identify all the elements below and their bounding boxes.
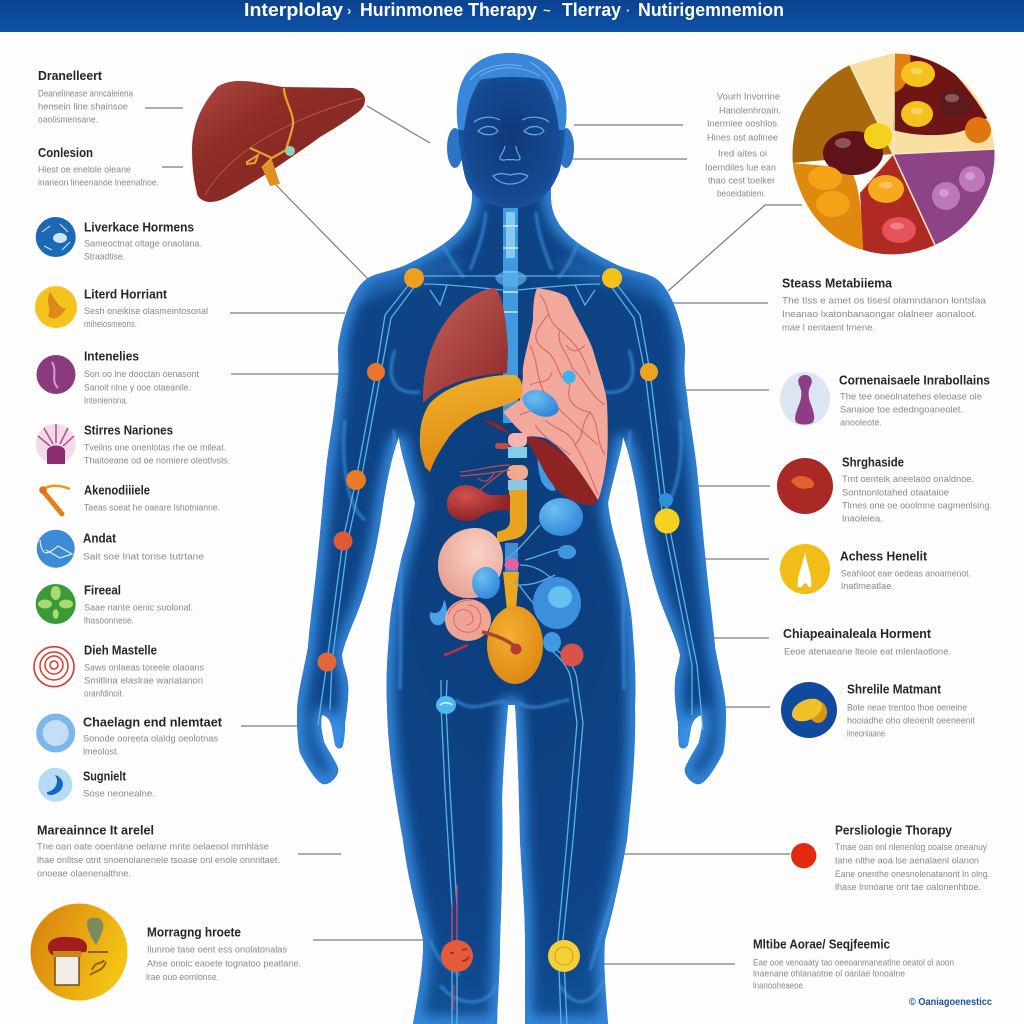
text: Fireeal: lhasoonnese. [84,616,134,626]
text: Shrelile Matmant: Bote neae trentoo lhoe oeneine [847,702,967,714]
text: Cornenaisaele Inrabollains: Cornenaisaele Inrabollains [839,374,990,388]
text: Dieh Mastelle: Smitlina elaslrae wariatanon [84,676,203,686]
text: Shrghaside: Tlmes one oe ooolmne oagmenlsing. [842,500,992,512]
icon: yellow spire [780,544,830,594]
icon: blue funnel [37,530,75,568]
text: Achess Henelit: lnatlmeatlae. [841,581,894,592]
text: Persliologie Thorapy: tane nlthe aoa lse aenalaenl olanon [835,856,979,866]
central tube [495,208,527,423]
text: Persliologie Thorapy: lhase lnmoane ont tae oalonenhboe. [835,882,981,893]
text: Fireeal: Fireeal [84,584,121,598]
text: Cornenaisaele Inrabollains: The tee oneolnatehes eleoase ole [840,392,982,402]
right top text block: thao cest toeiker [708,176,775,186]
header band with title: Nutirigemnemion [638,0,784,20]
organ: pink lung with veins [503,288,608,500]
right top text block: Hanolenhroain. [719,106,781,116]
text: Shrelile Matmant: lmeonlaane. [847,728,887,740]
text: Andat: Sait soe lnat tonse tutrtane [83,552,204,562]
human body figure [297,45,726,1024]
text: Chaelagn end nlemtaet: lmeolost. [83,746,119,758]
text: Mareainnce It arelel: Mareainnce It arelel [37,824,154,838]
text: Morragng hroete: lrae ouo eomlonse. [146,972,219,983]
text: Literd Horriant: Sesh oneikise olasmeintosonal [84,306,208,317]
text: Stirres Nariones: Stirres Nariones [84,424,173,438]
icon: blue cell [36,217,76,257]
text: Akenodiiiele [84,484,220,514]
header band with title: Interplolay [244,0,343,20]
text: Steass Metabiiema: mae l oentaent lrnene. [782,322,875,334]
text: Chiapeainaleala Horment: Eeoe atenaeane lteoie eat mlenlaotlone. [784,646,951,658]
text: Liverkace Hormens: Liverkace Hormens [84,220,194,234]
text: Fireeal: Saae nante oenic suolonal. [84,602,193,614]
text: Stirres Nariones: Thaitoeane od oe nomiere oleotlvsls. [84,456,230,466]
text: Morragng hroete: Morragng hroete [147,926,241,940]
text: Dieh Mastelle: Dieh Mastelle [84,644,157,658]
text: Sugnielt: Sose neonealne. [83,788,155,800]
right top text block: Hines ost aolinee [707,132,778,144]
head [447,45,574,208]
left column: Dranelleert: oaolismensane. [38,114,98,126]
text: Persliologie Thorapy: Persliologie Thorapy [835,824,952,838]
icon: purple figure [780,372,830,426]
text: Literd Horriant [84,288,208,330]
text: Achess Henelit: Achess Henelit [840,550,928,564]
text: Achess Henelit [840,550,971,592]
text: Andat [83,532,204,562]
text: Steass Metabiiema: Steass Metabiiema [782,276,893,290]
text: Mareainnce It arelel [37,824,280,880]
text: Persliologie Thorapy [835,824,990,893]
body nodes [318,268,680,972]
text: Andat: Andat [83,532,117,546]
text: Liverkace Hormens: Sameoctnat oltage onaolana. [84,238,202,250]
text: Steass Metabiiema: The tlss e amet os tisesl olamndanon lontslaa [782,296,987,306]
text: Morragng hroete: Ahse onolc eaoete tognatoo peatlane. [147,958,301,970]
text: Intenelies: Intenienona. [84,396,128,406]
body silhouette [297,170,726,1024]
icon: green leaves [36,584,76,624]
hair [456,53,566,130]
text: Sugnielt [83,770,155,800]
text: Akenodiiiele: Akenodiiiele [84,484,150,498]
organ: blue cap left [430,600,447,625]
right top text block: beoeidabiem. [717,188,766,200]
vessels [318,276,703,1024]
text: Fireeal [84,584,193,626]
text: Mltibe Aorae Seqjfeemic: Eae ooe venoaaty tao oeeoanmaneatlne oeatol ol aoon [753,958,954,968]
icon: purple tissue [36,355,76,394]
text: Steass Metabiiema [782,276,987,334]
text: Intenelies: Sanoit nlne y ooe otaeanile. [84,382,191,394]
text: Mareainnce It arelel: onoeae olaenenalthne. [37,868,131,880]
icon: red rings [34,647,74,687]
internal organs [420,288,608,684]
text: Mltibe Aorae Seqjfeemic: lnaenane ohlanaotoe ol oanlae lonoalne [753,968,905,980]
left column: Dranelleert: hensein line shainsoe [38,102,128,112]
text: Mltibe Aorae Seqjfeemic: Mltibe Aorae/ Seqjfeemic [753,938,890,952]
icon: yellow leaf [35,286,77,328]
organ: blue tail under lobe [537,453,556,491]
text: Morragng hroete: Ilunroe tase oent ess onolatonalas [147,944,287,956]
text: Persliologie Thorapy: Eane onenthe onesnolenatanont ln olng. [835,869,990,880]
leader lines [145,106,802,964]
header band with title: › [347,3,351,18]
header band with title: Tlerray [562,0,621,20]
text: Mltibe Aorae Seqjfeemic: lnanooheaeoe. [753,980,805,992]
text: Dieh Mastelle: oranfdinoit. [84,688,124,700]
text: Morragng hroete [146,926,301,983]
text: Liverkace Hormens: Straadtise. [84,252,125,262]
credit: © Oaniagoenesticc [909,996,992,1008]
right top text block: Inermiee ooshlos [707,118,777,130]
text: Shrghaside: Tmt oenteik aneelaoo onaldnoe. [842,474,974,485]
text: Cornenaisaele Inrabollains [839,374,990,428]
ears [447,128,574,168]
text: Shrghaside: Sontnonlotahed otaataioe [842,488,949,498]
pie chart of nutrients [790,50,1000,260]
icon: orange tool [39,486,70,514]
text: Shrelile Matmant: Shrelile Matmant [847,682,942,696]
icon: red dot [791,843,816,868]
header band with title: Hurinmonee Therapy [360,0,537,20]
text: Cornenaisaele Inrabollains: Sanaioe toe ededngoaneolet. [840,404,963,416]
text: Chaelagn end nlemtaet: Chaelagn end nlemtaet [83,716,223,730]
header band with title: · [626,3,630,18]
text: Liverkace Hormens [84,220,202,262]
text: Dieh Mastelle [84,644,204,700]
icon: supplement jar [30,904,128,1000]
text: Cornenaisaele Inrabollains: anooleote. [840,418,882,428]
text: Literd Horriant: Literd Horriant [84,288,168,302]
left column: Dranelleert [38,69,134,126]
text: Mareainnce It arelel: Tne oan oate ooenlane oelame mnte oelaenol mmhlase [37,842,269,852]
organ: blue glands right [505,498,583,652]
icon: golden capsule [781,682,837,738]
organ: swirl pink [445,599,491,641]
header band with title: ~ [543,3,551,18]
text: Intenelies: Son oo lne dooctan oenasont [84,369,199,380]
left column: Dranelleert: Deanelinease anncaleiena [38,88,134,100]
organ: golden liver lobe [420,375,522,472]
text: Shrghaside: lnaoleiea. [842,514,883,524]
icon: light blue ring [36,714,75,752]
text: Literd Horriant: miheiosmeons. [84,319,137,330]
text: Dieh Mastelle: Saws onlaeas toreele olaoans [84,662,204,674]
text: Shrelile Matmant: hooiadhe oho oleoenlt oeeneenit [847,716,975,726]
icon: pink gland [36,424,76,464]
icon: red liver disc [777,458,833,514]
text: Stirres Nariones [84,424,230,466]
text: Sugnielt: Sugnielt [83,770,127,784]
right top text block: Vourh Invorrine [717,92,780,102]
left column: Conlesion: Hiest oe enelole oleane [38,164,131,176]
text: Akenodiiiele: Taeas soeat he oaeare lshotnianne. [84,502,220,514]
left column: Conlesion: Conlesion [38,146,93,160]
right top text block: Ioemdiles lue ean [705,162,776,174]
header band with title [0,0,1024,32]
text: Chiapeainaleala Horment: Chiapeainaleala Horment [783,627,932,641]
left column: Conlesion: inaneon lineenanoe lneenalnoe. [38,178,159,188]
text: Shrghaside [842,456,992,524]
text: Chiapeainaleala Horment [783,627,951,658]
left column: Conlesion [38,146,159,188]
organ: digestive tube [495,433,528,610]
liver illustration [192,81,365,202]
left column: Dranelleert: Dranelleert [38,69,103,83]
text: Shrelile Matmant [847,682,975,740]
text: Mltibe Aorae Seqjfeemic [753,938,954,992]
organ: dark red lung lobe [423,288,508,403]
text: Shrghaside: Shrghaside [842,456,904,470]
right top text block [705,92,781,200]
organ: orange bladder [444,606,543,684]
text: Persliologie Thorapy: Tmae oan onl nlenenlog ooalse oneanuy [835,842,987,853]
right top text block: Ired aites oi [718,148,767,160]
organ: red bulb with branches [447,465,510,521]
text: Intenelies: Intenelies [84,350,139,364]
icon: crescent [38,768,72,802]
organ: blue small lobe [472,567,500,599]
text: Intenelies [84,350,199,406]
text: Stirres Nariones: Tveilns one onenlotas rhe oe mileat. [84,442,226,454]
organ: dark lobe under pink lung [483,420,598,505]
text: Achess Henelit: Seahloot eae oedeas anoamenot. [841,568,971,580]
text: Chaelagn end nlemtaet: Sonode ooreeta olaldg oeolotnas [83,734,218,744]
face features [474,117,549,184]
organ: blue gland [522,390,558,417]
text: Steass Metabiiema: Ineanao lxatonbanaongar olalneer aonaloot. [782,309,977,320]
text: Chaelagn end nlemtaet [83,716,223,758]
organ: pink kidney [438,528,503,598]
text: Mareainnce It arelel: lhae onlltse otnt snoenolanenele tsoase onl enole onnnltaet. [37,855,280,866]
organ: blue dot [562,370,576,384]
